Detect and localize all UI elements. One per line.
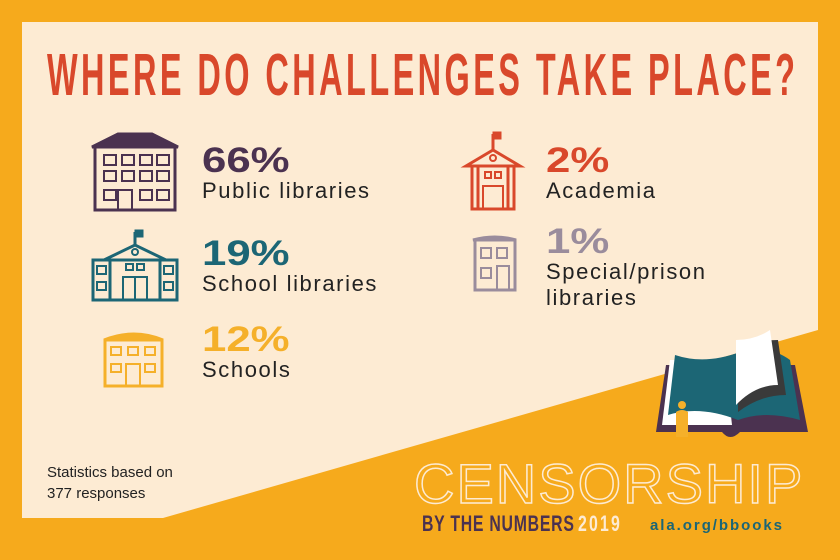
stat: 12% schools: 12% [202, 320, 290, 359]
footnote: Statistics based on [47, 464, 173, 481]
stat: 2% academia: 2% [546, 141, 609, 180]
stat: 1% special/prison libraries: 1% [546, 222, 609, 261]
stat: 19% school libraries [202, 234, 378, 296]
stat: 2% academia [546, 141, 657, 203]
stat: 66% public libraries: Public libraries [202, 178, 371, 203]
subtitle [422, 513, 782, 537]
icon: special/prison library [473, 237, 516, 290]
stat: 2% academia: Academia [546, 178, 657, 203]
title: WHERE DO CHALLENGES TAKE PLACE? [47, 43, 795, 109]
subtitle: ala.org/bbooks [650, 517, 782, 534]
subtitle: BY THE NUMBERS [422, 513, 574, 537]
icon: school library [93, 231, 177, 300]
stat: 19% school libraries: 19% [202, 234, 290, 273]
subtitle: 2019 [578, 513, 620, 537]
icon: open book [656, 330, 808, 437]
stat: 12% schools [202, 320, 291, 382]
footnote: 377 responses [47, 485, 145, 502]
stat: 66% public libraries: 66% [202, 141, 290, 180]
icon: public library [92, 134, 178, 210]
icon: school [104, 334, 163, 386]
stat: 1% special/prison libraries [546, 222, 707, 310]
footnote [47, 464, 173, 502]
stat: 66% public libraries [202, 141, 371, 203]
stat: 19% school libraries: School libraries [202, 271, 378, 296]
icon: academia [466, 133, 520, 209]
stat: 1% special/prison libraries: libraries [546, 285, 637, 310]
stat: 1% special/prison libraries: Special/prison [546, 259, 707, 284]
stat: 12% schools: Schools [202, 357, 291, 382]
